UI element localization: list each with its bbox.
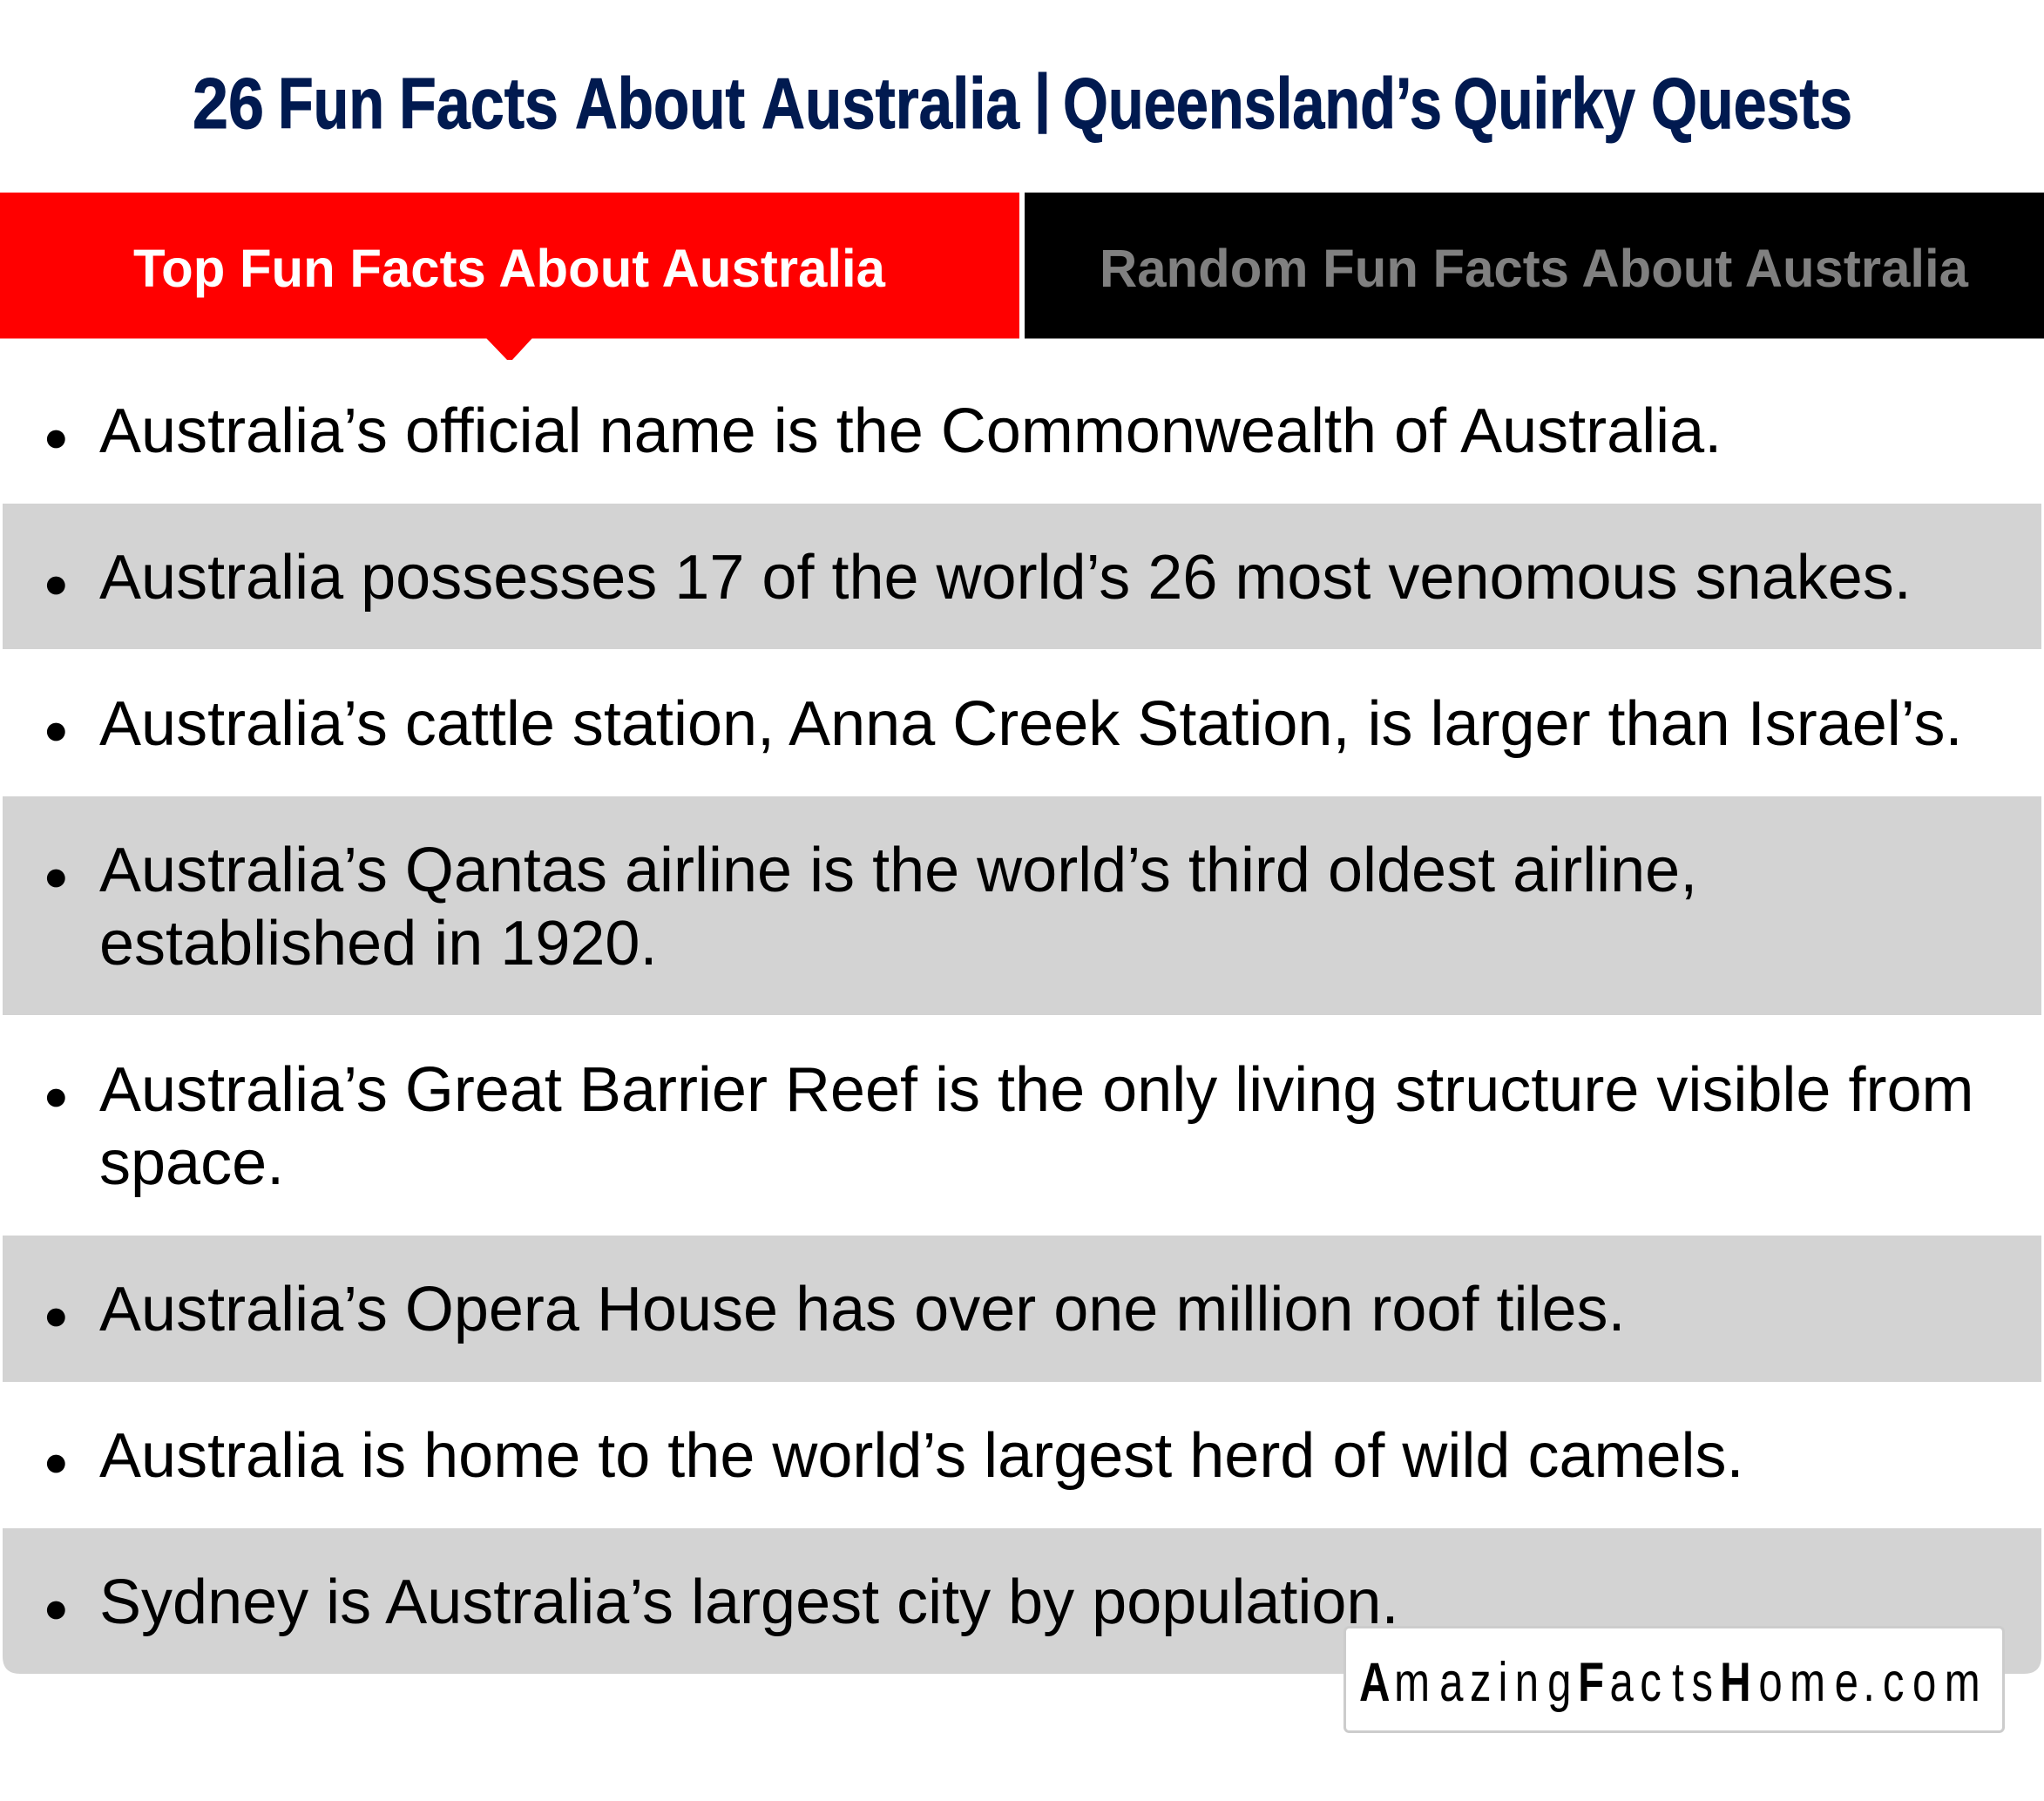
fact row 5: space.: [99, 1128, 284, 1198]
tab: top fun facts (active): Top Fun Facts About Australia: [133, 239, 886, 298]
title: Australia: [761, 63, 1020, 144]
fact row 4: established in 1920.: [99, 909, 657, 978]
fact row 4: Australia’s Qantas airline is the world’s third oldest airline,: [99, 836, 1697, 905]
title: Quirky: [1453, 63, 1635, 144]
fact row 8: [3, 1528, 2041, 1674]
title: [193, 60, 1852, 144]
title: About: [575, 63, 745, 144]
fact row 6: Australia’s Opera House has over one million roof tiles.: [99, 1275, 1626, 1344]
watermark badge: A: [1359, 1651, 1390, 1712]
tab: top fun facts (active): [0, 193, 1019, 360]
title: Queensland’s: [1063, 63, 1442, 144]
watermark badge: acts: [1610, 1651, 1713, 1712]
title: Fun: [278, 63, 384, 144]
fact row 4: [3, 796, 2041, 1015]
watermark badge: ome.com: [1758, 1651, 1980, 1712]
fact row 5: [47, 1055, 1973, 1198]
fact row 2: [3, 504, 2041, 649]
fact row 8: Sydney is Australia’s largest city by population.: [99, 1567, 1398, 1637]
fact row 3: Australia’s cattle station, Anna Creek Station, is larger than Israel’s.: [99, 689, 1962, 759]
fact row 6: [3, 1236, 2041, 1382]
title: |: [1033, 60, 1052, 134]
tab: random fun facts (inactive): [1025, 193, 2044, 338]
watermark badge: mazing: [1394, 1651, 1571, 1712]
tab: random fun facts (inactive): Random Fun Facts About Australia: [1100, 239, 1969, 298]
fact list: [3, 396, 2041, 1674]
watermark badge: [1345, 1628, 2004, 1732]
watermark badge: F: [1578, 1651, 1604, 1712]
fact row 5: Australia’s Great Barrier Reef is the only living structure visible from: [99, 1055, 1973, 1125]
title: 26: [193, 63, 264, 144]
fact row 1: Australia’s official name is the Commonwealth of Australia.: [99, 396, 1722, 466]
fact row 2: Australia possesses 17 of the world’s 26 most venomous snakes.: [99, 543, 1912, 613]
title: Facts: [399, 63, 558, 144]
fact row 7: Australia is home to the world’s largest herd of wild camels.: [99, 1421, 1744, 1491]
title: Quests: [1651, 63, 1852, 144]
watermark badge: H: [1720, 1651, 1751, 1712]
